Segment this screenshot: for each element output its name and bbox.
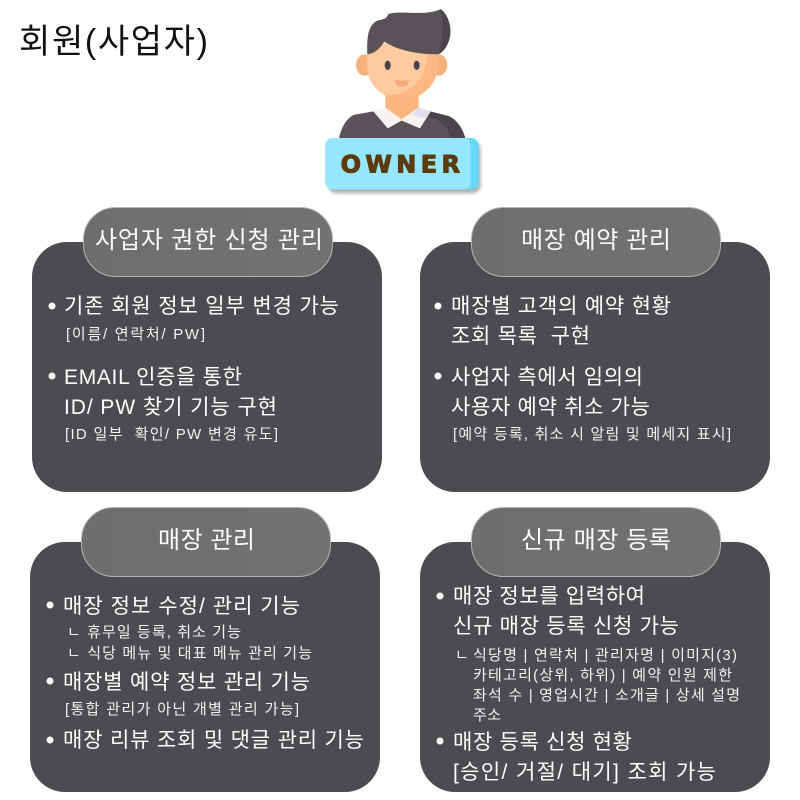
bullet list: [승인/ 거절/ 대기] 조회 가능 [453, 761, 716, 784]
bullet list: 카테고리(상위, 하위) | 예약 인원 제한 [473, 667, 732, 684]
icon: owner avatar with badge [325, 9, 481, 193]
icon: hair [367, 9, 450, 54]
icon: shirt [339, 111, 465, 138]
icon: eyes [385, 61, 420, 70]
panel: 신규 매장 등록 [420, 508, 770, 792]
panel background [32, 242, 382, 492]
bullet list: 식당명 | 연락처 | 관리자명 | 이미지(3) [473, 647, 737, 664]
bullet list: 조회 목록 구현 [451, 325, 590, 348]
bullet list: 기존 회원 정보 일부 변경 가능 [64, 295, 339, 318]
panel heading: 매장 관리 [158, 527, 255, 554]
badge: side [325, 138, 479, 189]
panel heading pill [472, 208, 720, 276]
bullet list [48, 295, 339, 443]
bullet list: 사용자 예약 취소 가능 [451, 396, 650, 419]
icon: face shade [386, 53, 437, 100]
panel heading: 매장 예약 관리 [521, 227, 671, 254]
panel background [420, 542, 770, 792]
panel heading: 신규 매장 등록 [521, 527, 671, 554]
panel: 매장 관리 [30, 508, 380, 792]
bullet list [46, 595, 364, 752]
badge: shadow [328, 141, 481, 193]
icon: face [367, 43, 437, 100]
bullet list: 매장 등록 신청 현황 [453, 731, 632, 754]
bullet list: 매장 정보를 입력하여 [453, 585, 645, 608]
panel background [420, 242, 770, 492]
panel: 매장 예약 관리 [420, 208, 770, 492]
panel background [30, 542, 380, 792]
icon: hair shade [438, 9, 450, 54]
panel heading pill [472, 508, 720, 576]
bullet list [434, 295, 731, 443]
bullet list: ㄴ 식당 메뉴 및 대표 메뉴 관리 기능 [67, 645, 312, 662]
bullet list: [예약 등록, 취소 시 알림 및 메세지 표시] [453, 426, 731, 443]
badge: face [325, 138, 471, 189]
icon: mouth [395, 80, 409, 87]
bullet list: [통합 관리가 아닌 개별 관리 가능] [65, 701, 299, 718]
bullet list: ㄴ 휴무일 등록, 취소 기능 [67, 624, 241, 641]
badge: label: OWNER [341, 151, 460, 179]
icon: ears [356, 54, 447, 76]
bullet list: 주소 [473, 707, 501, 724]
panel heading pill [84, 208, 332, 276]
bullet list: 매장별 고객의 예약 현황 [451, 295, 671, 318]
icon: collar [373, 107, 431, 128]
bullet list: 사업자 측에서 임의의 [451, 366, 643, 389]
bullet list: 매장별 예약 정보 관리 기능 [63, 671, 310, 694]
title: 회원(사업자) [19, 23, 208, 61]
icon: shirt shade [428, 111, 465, 138]
bullet list: [ID 일부 확인/ PW 변경 유도] [65, 426, 278, 443]
bullet list: ID/ PW 찾기 기능 구현 [64, 396, 277, 419]
bullet list: [이름/ 연락처/ PW] [66, 326, 205, 343]
bullet list: 좌석 수 | 영업시간 | 소개글 | 상세 설명 [473, 687, 740, 704]
panel heading: 사업자 권한 신청 관리 [95, 227, 323, 254]
bullet list: 신규 매장 등록 신청 가능 [453, 615, 679, 638]
bullet list: 매장 리뷰 조회 및 댓글 관리 기능 [63, 729, 364, 752]
bullet list: ㄴ [455, 647, 469, 664]
panel heading pill [82, 508, 330, 576]
bullet list: EMAIL 인증을 통한 [64, 366, 242, 389]
bullet list [436, 585, 740, 784]
icon: collar shade [412, 107, 431, 118]
bullet list: 매장 정보 수정/ 관리 기능 [63, 595, 300, 618]
icon: neck [385, 93, 419, 119]
panel: 사업자 권한 신청 관리 [32, 208, 382, 492]
